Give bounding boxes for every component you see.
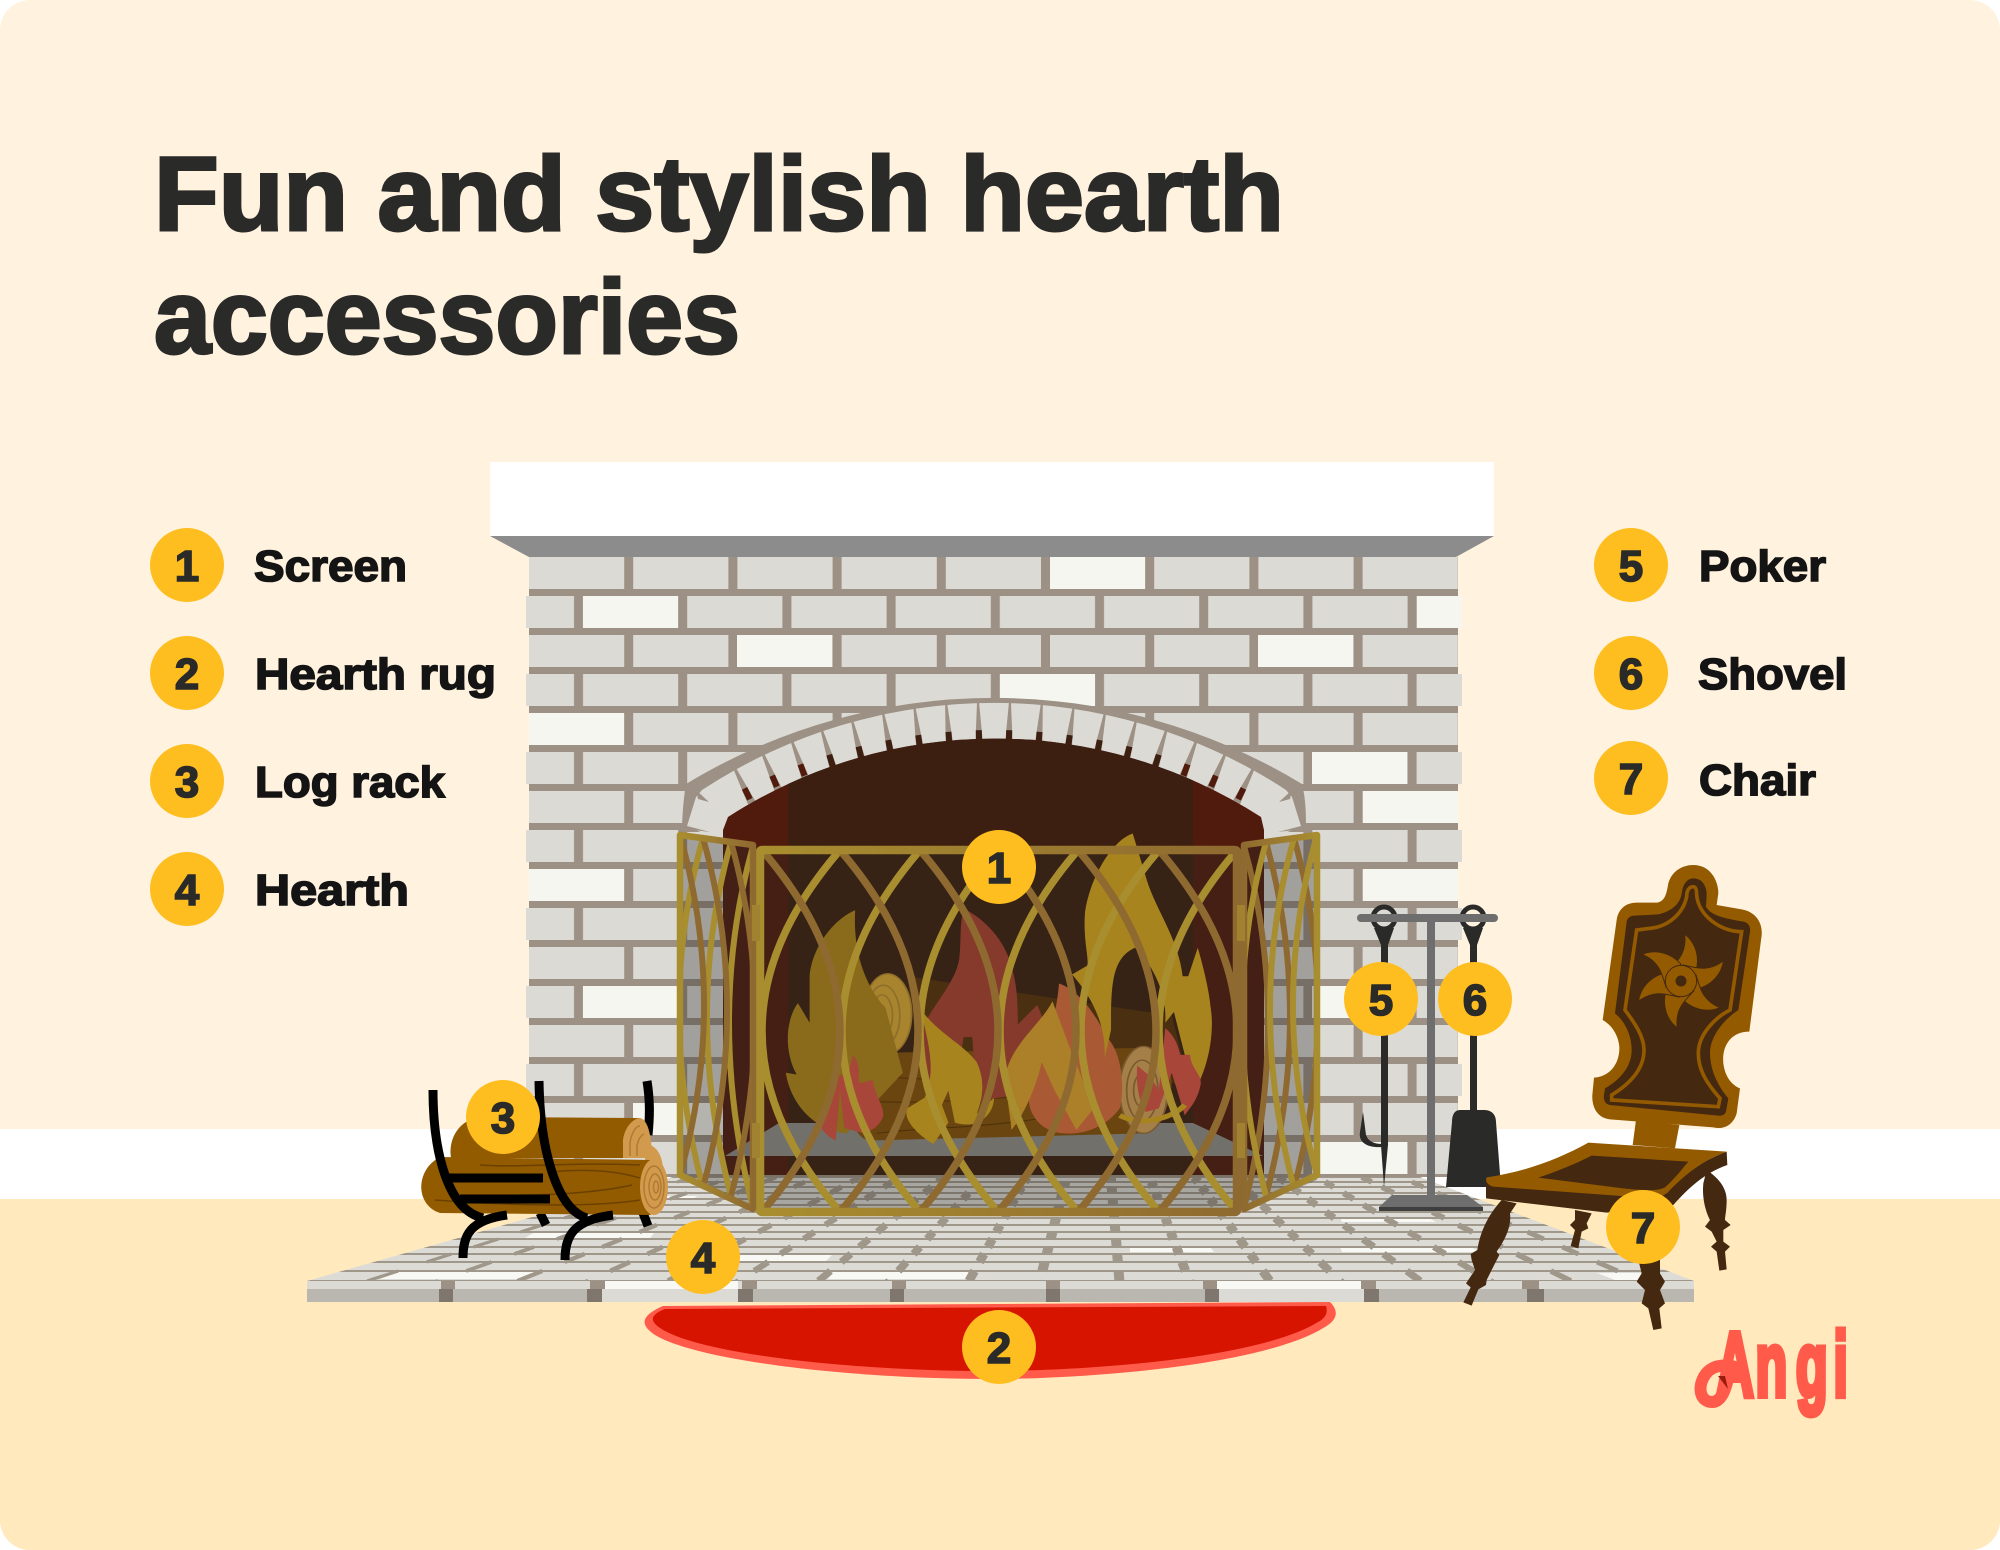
right red flames [1137, 1028, 1201, 1116]
title: Fun and stylish hearth [154, 136, 1284, 253]
marker 1 on screen [962, 830, 1036, 904]
centre panel frame [760, 850, 1237, 1212]
white hearth bricks [380, 1196, 1655, 1280]
legend item: Screen [150, 528, 407, 602]
marker 6 on shovel [1438, 962, 1512, 1036]
front log end [1120, 1046, 1167, 1133]
upper log [450, 1117, 663, 1175]
chair neck [1633, 1120, 1679, 1148]
marker 2 on rug: 2 [987, 1324, 1011, 1373]
chair back pinwheel [1632, 934, 1730, 1028]
Angi logo: Angi [1716, 1312, 1848, 1416]
marker 1 on screen: 1 [987, 844, 1011, 893]
left panel [679, 835, 755, 1209]
lower log [421, 1157, 668, 1215]
ember swoosh [1120, 1105, 1185, 1121]
chair legs [1463, 1170, 1731, 1330]
fire logs [848, 974, 1183, 1141]
rack frame [433, 1081, 613, 1260]
legend item: Poker: Poker [1699, 542, 1826, 591]
legend item: Log rack [150, 744, 446, 818]
hearth front edge [307, 1281, 1694, 1302]
marker 4 on hearth: 4 [691, 1234, 716, 1283]
marker 7 on chair [1606, 1190, 1680, 1264]
marker 7 on chair: 7 [1631, 1204, 1655, 1253]
legend item: Poker [1594, 528, 1826, 602]
centre red flame [916, 908, 1050, 1101]
poker [1360, 907, 1395, 1187]
legend item: Shovel [1594, 636, 1847, 710]
legend item: Chair [1594, 741, 1816, 815]
marker 3 on log rack [466, 1080, 540, 1154]
marker 6 on shovel: 6 [1463, 976, 1487, 1025]
legend item: Hearth rug: 2 [175, 650, 199, 699]
legend item: Log rack: Log rack [255, 758, 446, 807]
legend item: Hearth: Hearth [255, 866, 409, 915]
legend item: Hearth: 4 [175, 866, 200, 915]
marker 5 on poker: 5 [1369, 976, 1393, 1025]
legend item: Log rack: 3 [175, 758, 199, 807]
legend item: Hearth rug: Hearth rug [255, 650, 496, 699]
legend item: Hearth rug [150, 636, 496, 710]
legend item: Screen: Screen [254, 542, 407, 591]
right yellow-orange flame [1007, 1001, 1094, 1130]
chair [1463, 865, 1762, 1330]
legend item: Poker: 5 [1619, 542, 1643, 591]
arch joint notches [742, 730, 1246, 800]
legend item: Screen: 1 [175, 542, 199, 591]
red-orange flame [1029, 983, 1122, 1134]
hinges [752, 905, 1245, 1158]
legend item: Chair: Chair [1699, 756, 1816, 805]
fire screen [679, 835, 1318, 1212]
marker 4 on hearth [666, 1220, 740, 1294]
marker 3 on log rack: 3 [491, 1094, 515, 1143]
brick chimney wall [526, 557, 1462, 1177]
brick arch [682, 698, 1306, 842]
middle yellow flame [906, 1008, 994, 1144]
left red flame [820, 1055, 883, 1141]
chair seat [1486, 1143, 1727, 1213]
marker 2 on rug [962, 1310, 1036, 1384]
hearth rug [645, 1302, 1336, 1379]
big right flame [1072, 834, 1212, 1105]
chair back [1592, 865, 1762, 1128]
legend item: Shovel: Shovel [1698, 650, 1847, 699]
title [154, 136, 1284, 376]
back log end [864, 974, 912, 1054]
mantel [490, 462, 1494, 557]
baseboard [0, 1129, 2000, 1201]
stand [1379, 918, 1483, 1211]
legend left [150, 528, 496, 926]
screen mesh tint [680, 835, 1317, 1212]
firebox opening [723, 700, 1264, 1180]
centre panel lattice [764, 854, 1233, 1208]
legend right [1594, 528, 1847, 815]
legend item: Chair: 7 [1619, 755, 1643, 804]
legend item: Hearth [150, 852, 409, 926]
left flame [786, 910, 903, 1133]
marker 5 on poker [1344, 962, 1418, 1036]
legend item: Shovel: 6 [1619, 650, 1643, 699]
shovel [1446, 907, 1501, 1187]
title: accessories [154, 259, 740, 376]
poker and shovel stand [1357, 907, 1501, 1211]
flames [786, 834, 1212, 1144]
rail [1357, 914, 1498, 922]
log rack [421, 1081, 668, 1260]
floor [0, 1199, 2000, 1550]
back hoop [540, 1081, 649, 1226]
right panel [1242, 835, 1318, 1209]
hearth platform [307, 1177, 1694, 1302]
